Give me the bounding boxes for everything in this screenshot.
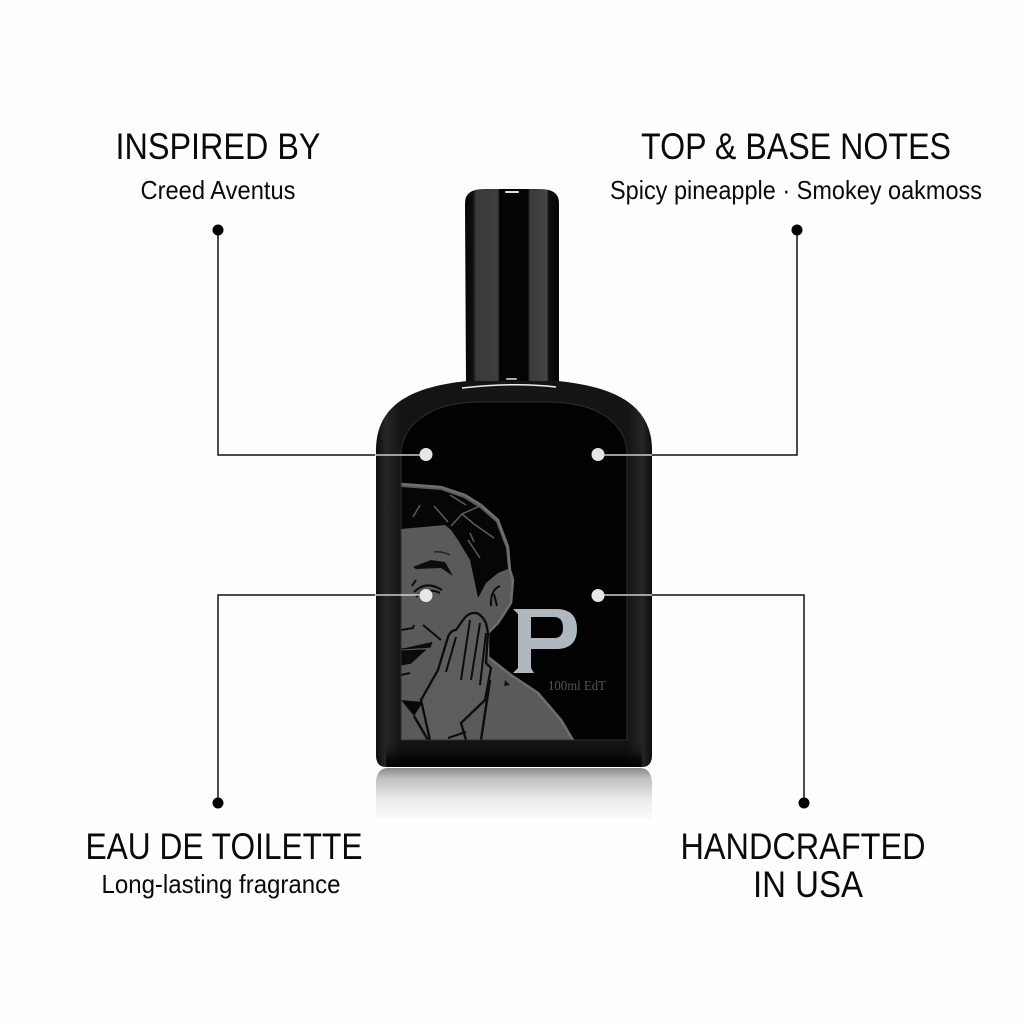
heading: eau de toilette: Long-lasting fragrance <box>102 869 340 899</box>
label <box>400 400 628 741</box>
man: eye <box>412 580 442 597</box>
label volume text: 100ml EdT <box>548 679 606 694</box>
label letter P <box>513 609 577 673</box>
man: eyebrow <box>413 560 453 576</box>
man: neck line <box>481 680 490 740</box>
heading: eau de toilette: EAU DE TOILETTE <box>86 826 362 867</box>
callout: handcrafted <box>592 589 810 808</box>
man: hair <box>401 487 508 598</box>
man: mouth <box>401 642 432 665</box>
heading: top and base notes <box>610 126 982 205</box>
perfume bottle <box>376 189 652 767</box>
man: skin and shoulder <box>401 484 573 740</box>
callout: eau de toilette <box>212 589 432 808</box>
heading: top and base notes: TOP & BASE NOTES <box>641 126 951 167</box>
man: nose and cheek <box>401 625 441 640</box>
heading: inspired by: INSPIRED BY <box>116 126 320 167</box>
heading: handcrafted in usa: IN USA <box>753 864 863 905</box>
man: ear detail <box>491 586 500 606</box>
man: outline <box>401 484 573 740</box>
heading: top and base notes: Spicy pineapple · Smokey oakmoss <box>610 175 982 205</box>
illustration: man <box>401 484 573 740</box>
man: collar <box>402 700 421 716</box>
heading: eau de toilette <box>86 826 362 899</box>
man: hand <box>421 613 491 740</box>
bottle cap <box>465 189 559 384</box>
heading: handcrafted in usa <box>680 826 926 905</box>
callout: inspired by <box>212 224 432 461</box>
callout: top and base notes <box>592 224 802 461</box>
heading: handcrafted in usa: HANDCRAFTED <box>680 826 926 867</box>
heading: inspired by <box>116 126 320 205</box>
heading: inspired by: Creed Aventus <box>140 175 296 205</box>
bottle body <box>376 381 652 767</box>
bottle reflection <box>376 768 652 822</box>
man: hair highlights <box>413 495 494 558</box>
